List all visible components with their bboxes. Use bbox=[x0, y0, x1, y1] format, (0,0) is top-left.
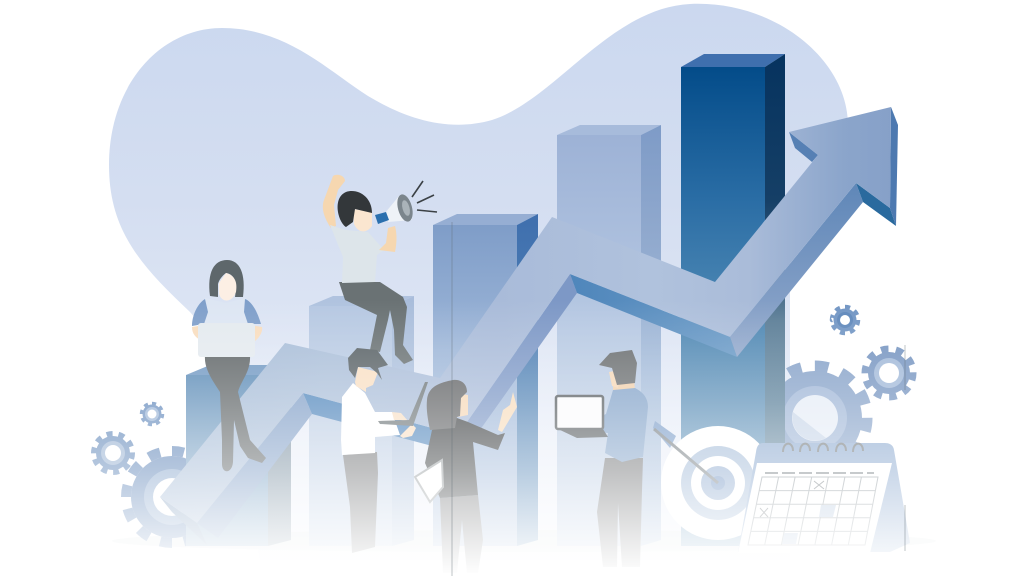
hand bbox=[582, 420, 594, 433]
face bbox=[219, 273, 236, 301]
arrow: top face bbox=[160, 107, 891, 523]
vertical hairlines bbox=[452, 222, 905, 576]
marked days bbox=[760, 481, 824, 517]
calendar face bbox=[738, 463, 892, 553]
face bbox=[355, 367, 378, 392]
bar 2 bbox=[309, 296, 414, 546]
gear: medium right bbox=[865, 349, 913, 397]
calendar back bbox=[738, 443, 910, 552]
hair bbox=[599, 350, 637, 385]
megaphone bbox=[375, 193, 415, 224]
ground shadow bbox=[112, 530, 936, 552]
bar chart bbox=[186, 54, 785, 546]
pants bbox=[343, 452, 378, 553]
torso bbox=[204, 298, 249, 325]
tablet bbox=[415, 460, 443, 502]
gear: medium left bbox=[94, 434, 132, 472]
hair bbox=[348, 348, 388, 380]
bar 4 bbox=[557, 125, 661, 546]
grid bbox=[748, 477, 878, 545]
gear: large right bbox=[763, 366, 867, 470]
target rings bbox=[661, 426, 775, 540]
hands bbox=[192, 325, 262, 341]
shirt bbox=[330, 225, 384, 283]
bar 1 bbox=[186, 365, 291, 546]
shirt bbox=[341, 383, 400, 455]
background blob bbox=[109, 4, 848, 560]
person: man with open laptop bbox=[556, 350, 648, 567]
person: seated woman with laptop bbox=[192, 260, 266, 471]
face bbox=[456, 393, 468, 417]
day header bbox=[765, 472, 874, 474]
arm and hand bbox=[498, 392, 517, 432]
person: woman with megaphone bbox=[323, 175, 437, 364]
gears left bbox=[94, 404, 218, 543]
shirt bbox=[590, 388, 648, 462]
hair bbox=[338, 191, 372, 227]
legs bbox=[205, 356, 266, 471]
gear: large left bbox=[126, 451, 218, 543]
rising arrow bbox=[160, 107, 898, 545]
hair bbox=[427, 380, 467, 430]
person: woman pointing bbox=[415, 380, 517, 573]
jacket bbox=[425, 418, 505, 498]
highlighted days bbox=[782, 505, 836, 544]
face bbox=[609, 370, 620, 388]
bottom white fade bbox=[0, 300, 1024, 576]
hand bbox=[392, 412, 416, 438]
raised arm bbox=[323, 175, 345, 228]
bar 5 bbox=[681, 54, 785, 546]
calendar bbox=[738, 443, 910, 553]
neck bbox=[613, 378, 635, 391]
pants bbox=[597, 458, 643, 567]
laptop bbox=[198, 323, 255, 357]
hair bbox=[209, 260, 244, 297]
bar 3 bbox=[433, 214, 538, 546]
laptop base bbox=[558, 429, 608, 438]
legs bbox=[339, 282, 413, 364]
sound lines bbox=[412, 181, 437, 212]
person: man with laptop bbox=[341, 348, 428, 553]
sleeves bbox=[192, 299, 261, 326]
dart bbox=[653, 421, 718, 483]
gears right bbox=[763, 307, 913, 470]
face bbox=[353, 209, 372, 231]
other arm bbox=[379, 226, 396, 252]
arrow: side faces bbox=[160, 107, 898, 545]
binding rings bbox=[783, 444, 863, 452]
pants bbox=[440, 495, 483, 573]
target with dart bbox=[653, 421, 775, 540]
laptop bbox=[378, 382, 428, 426]
laptop screen bbox=[556, 396, 603, 429]
gear: small right bbox=[832, 307, 858, 333]
gear: small left bbox=[142, 404, 162, 424]
